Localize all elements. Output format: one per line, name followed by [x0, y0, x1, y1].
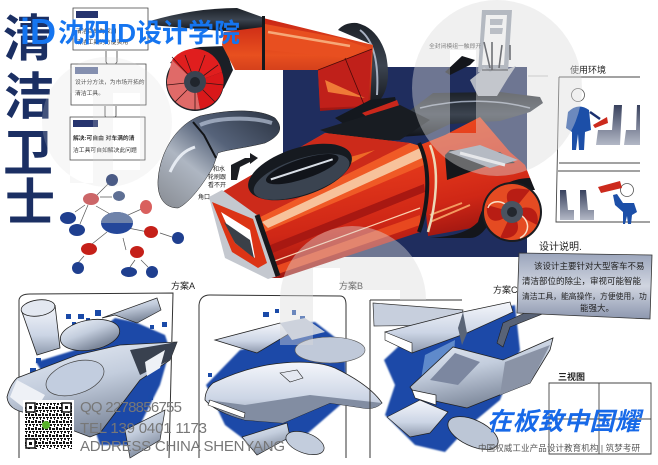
body — [410, 338, 553, 408]
flow box: solution: 解决:可自由 对车满的清 — [73, 134, 135, 142]
logo — [20, 11, 240, 52]
scheme labels: 方案C — [493, 284, 518, 295]
dark arm — [338, 23, 388, 109]
person 2 — [598, 181, 637, 224]
slogan: 在板致中国耀 — [487, 408, 644, 436]
wedge — [387, 400, 448, 437]
annotation: holder: 全封闭模组一触即开 — [429, 42, 481, 50]
flow box: method: 清洁工具。 — [75, 89, 104, 97]
title: 卫 — [3, 125, 53, 181]
scheme panel C — [370, 300, 560, 458]
wheel — [166, 53, 224, 111]
rear wheel — [482, 182, 542, 242]
flow box: method — [71, 64, 146, 105]
title: 洁 — [4, 69, 54, 125]
scheme labels: 方案A — [171, 280, 195, 291]
title: 清 — [3, 11, 53, 67]
annotation: nozzle: 和水 — [213, 165, 225, 173]
arrow: flow 2 — [105, 106, 116, 124]
joint ring — [419, 143, 427, 232]
front frame — [209, 190, 278, 279]
heading: design notes: 设计说明. — [539, 240, 582, 253]
panel: design notes — [517, 253, 652, 319]
scheme panel B — [199, 295, 382, 459]
nozzle — [497, 300, 560, 347]
wheel arch — [430, 178, 535, 238]
front body — [222, 133, 426, 278]
QR code — [23, 400, 74, 451]
panel: usage environment — [556, 64, 650, 224]
title: 士 — [5, 175, 55, 231]
annotation: nozzle: 轮刷跟 — [208, 173, 226, 181]
panel: design notes: 能强大。 — [580, 303, 614, 313]
contact text: TEL 139 0401 1173 — [80, 420, 207, 437]
body — [7, 342, 177, 437]
lower block — [242, 423, 290, 455]
window — [241, 132, 359, 212]
nozzle attachment — [158, 111, 280, 208]
bubble diagram — [60, 174, 184, 278]
arrow: attachment — [231, 153, 258, 180]
arrow: holder — [445, 56, 475, 75]
blue marker — [36, 318, 170, 445]
three views grid — [549, 371, 651, 454]
contact text — [80, 399, 285, 455]
rear dark top — [400, 92, 543, 137]
title — [3, 11, 55, 231]
logo: iD — [20, 11, 56, 52]
top block — [215, 323, 292, 353]
red body — [222, 18, 373, 111]
panel: design notes: 该设计主要针对大型客车不易 — [534, 261, 645, 271]
cylinder — [22, 305, 60, 355]
back block — [373, 303, 463, 326]
oval — [58, 315, 122, 355]
flow box: solution — [70, 117, 145, 160]
contact text: QQ 2278856755 — [80, 399, 182, 416]
grip — [150, 8, 262, 31]
panel: design notes: 清洁部位的除尘，审视可能智能 — [522, 276, 642, 286]
tagline: 中国权威工业产品设计教育机构 | 筑梦考研 — [478, 443, 640, 453]
panel: design notes: 清洁工具，能高操作，方便使用，功 — [522, 291, 647, 301]
annotation: nozzle: 角口 — [198, 193, 210, 201]
upper view: vacuum side — [150, 8, 388, 111]
flow box: purpose: 清洁目的为家用 — [76, 27, 117, 35]
person 1 — [566, 88, 608, 150]
rear section — [420, 117, 532, 236]
flow box: method: 设计分方法，为市场开拓的 — [75, 78, 145, 86]
flow box: solution: 洁工具可自如解决此问题 — [73, 146, 137, 154]
watermark — [42, 0, 582, 345]
flow box: purpose — [73, 8, 148, 50]
arrow: flow 1 — [106, 51, 117, 70]
lower part — [125, 410, 165, 458]
flow box: purpose: 清洁工具的方便实用 — [76, 38, 128, 46]
logo: 沈阳ID设计学院 — [58, 18, 240, 48]
chairs 1 — [596, 105, 640, 145]
transparent holder — [470, 10, 516, 96]
three views grid: 三视图 — [558, 371, 585, 382]
scheme labels — [171, 280, 518, 295]
annotation: nozzle: 看不开 — [208, 181, 226, 189]
chairs 2 — [560, 190, 594, 220]
scheme panel A — [7, 293, 177, 458]
arm — [385, 302, 513, 353]
body — [205, 362, 382, 423]
scheme labels: 方案B — [339, 280, 363, 291]
main vacuum body — [209, 92, 543, 279]
navy backing panel — [283, 67, 527, 257]
heading: 使用环境 — [570, 64, 606, 75]
handle — [102, 298, 161, 323]
annotation: nozzle — [198, 165, 226, 201]
contact text: ADDRESS CHINA SHENYANG — [80, 438, 285, 455]
